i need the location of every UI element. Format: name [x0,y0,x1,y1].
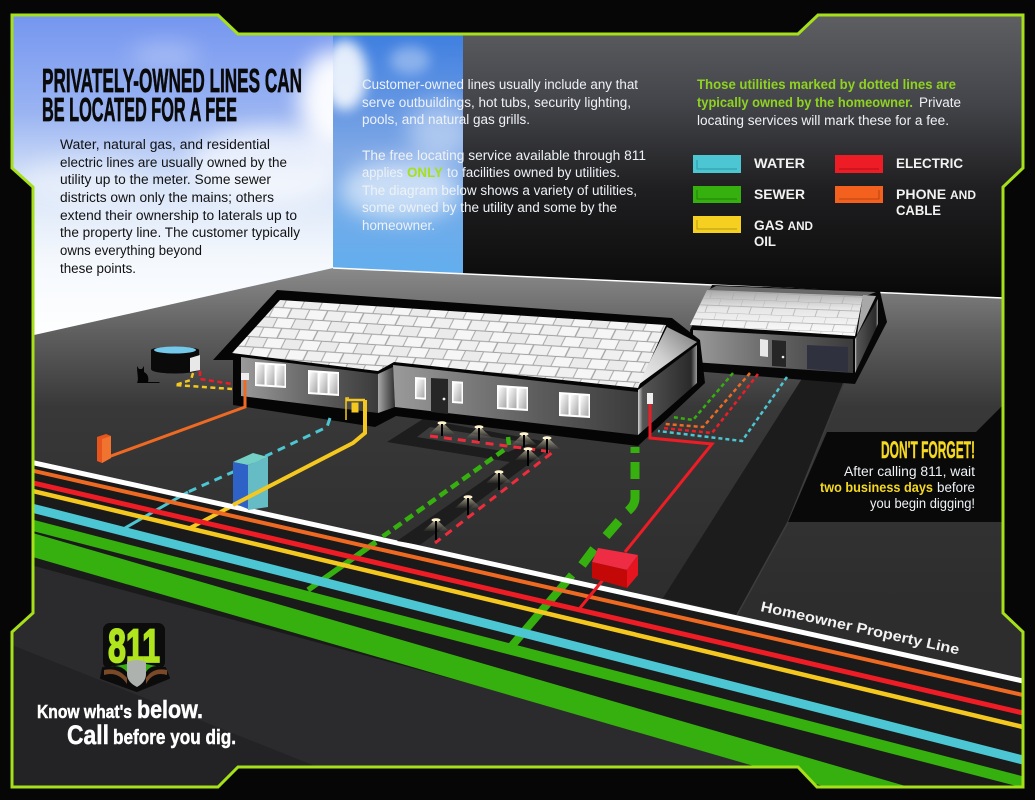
electric line to pool [200,371,232,384]
landscape lights [423,421,560,543]
garage [690,285,887,384]
legend: water: WATER [754,156,805,171]
legend: gas and oil [693,216,813,249]
gas line to pool [175,373,232,389]
text block: customer-owned lines: ONLY [407,165,443,180]
legend: sewer: SEWER [754,187,805,202]
transformer [592,548,638,588]
title [42,62,302,128]
text block: customer-owned lines: to facilities owned by utilities. [447,165,620,180]
text block: customer-owned lines [362,77,646,233]
garage dotted lines [658,373,787,441]
panel: dark backdrop [463,16,1022,274]
text block: utility ownership: these points. [60,261,136,276]
lower left shadow [43,658,312,766]
legend: sewer [693,186,805,203]
utility cabinet [233,453,268,510]
text block: utility ownership: owns everything beyond [60,243,202,258]
stripe: electric [12,478,1023,713]
text block: utility ownership: utility up to the meter. Some sewer [60,172,271,187]
legend: gas and oil: OIL [754,234,776,249]
text block: utility ownership: the property line. The customer typically [60,225,300,240]
electric meter [647,393,653,404]
main sewer lateral below property line [510,575,572,648]
sewer lateral dashed [382,437,509,537]
legend: phone and cable: CABLE [896,203,941,218]
callout text: don't forget: After calling 811, wait [844,464,975,479]
ground [34,268,1022,678]
main house [213,290,705,446]
text block: customer-owned lines: Customer-owned lines usually include any that [362,77,638,92]
gas service below property line [190,507,230,528]
stripe: sewer main 1 [12,520,1023,782]
tagline: before you dig. [113,727,236,749]
stripe: phone [12,466,1023,695]
stripe: gas [12,486,1023,727]
sewer lateral below property line [308,542,376,590]
legend: gas and oil: GAS AND [754,218,813,233]
logo: 811 [101,619,169,691]
icon: cat [137,366,160,383]
property line label: Homeowner Property Line [759,599,961,658]
text block: utility ownership: Water, natural gas, and residential [60,137,270,152]
callout text: don't forget: two business days [820,480,933,495]
text block: utility ownership [60,137,300,276]
pool [151,346,199,374]
water service line [188,418,330,492]
street area [12,458,1023,800]
electric service line [580,403,712,608]
callout text: don't forget [820,437,975,511]
tagline: Know what's [37,702,132,722]
text block: dotted lines note: Those utilities marked by dotted lines are [697,77,956,92]
tagline: Call [67,720,109,750]
panel: left sky [14,16,333,335]
landscaping bed [387,419,548,545]
driveway [663,377,845,615]
text block: utility ownership: districts own only the mains; others [60,190,274,205]
callout text: don't forget: before [937,480,975,495]
pool pump box [190,355,200,372]
legend: phone and cable [835,186,976,218]
horizon line [333,268,1003,298]
title: BE LOCATED FOR A FEE [42,91,237,128]
logo: 811: 811 [108,619,160,672]
legend: electric: ELECTRIC [896,156,963,171]
stripe: water [12,503,1023,760]
title: PRIVATELY-OWNED LINES CAN [42,62,302,99]
legend: phone and cable: PHONE AND [896,187,976,202]
callout text: don't forget: you begin digging! [870,496,975,511]
stripe: sewer main 2 [34,534,904,786]
stripe: property line [12,458,1023,681]
callout panel: don't forget [788,405,1003,522]
text block: utility ownership: electric lines are usually owned by the [60,155,287,170]
text block: customer-owned lines: some owned by the utility and some by the [362,200,617,215]
text block: customer-owned lines: The free locating service available through 811 [362,148,646,163]
legend: electric [835,155,963,173]
phone line [97,373,249,463]
legend [693,155,976,249]
driveway edge [737,380,845,615]
text block: customer-owned lines: The diagram below shows a variety of utilities, [362,183,637,198]
text block: customer-owned lines: applies [362,165,403,180]
text block: dotted lines note [697,77,961,128]
text block: customer-owned lines: pools, and natural gas grills. [362,112,530,127]
water service below property line [125,492,188,528]
gas service line and meter [233,398,365,505]
text block: dotted lines note: typically owned by the homeowner. [697,95,913,110]
tagline [37,696,236,750]
lower left ground [14,566,820,786]
text block: dotted lines note: locating services will mark these for a fee. [697,113,949,128]
legend: water [693,155,805,173]
panel: middle sky [333,36,463,274]
tagline: below. [137,696,203,724]
utility stripes [12,458,1023,800]
text block: customer-owned lines: serve outbuildings, hot tubs, security lighting, [362,95,631,110]
text block: customer-owned lines: homeowner. [362,218,435,233]
text block: utility ownership: extend their ownership to laterals up to [60,208,297,223]
sewer main lateral [582,447,635,565]
text block: dotted lines note: Private [919,95,961,110]
service lines under the street stripes [125,492,572,648]
